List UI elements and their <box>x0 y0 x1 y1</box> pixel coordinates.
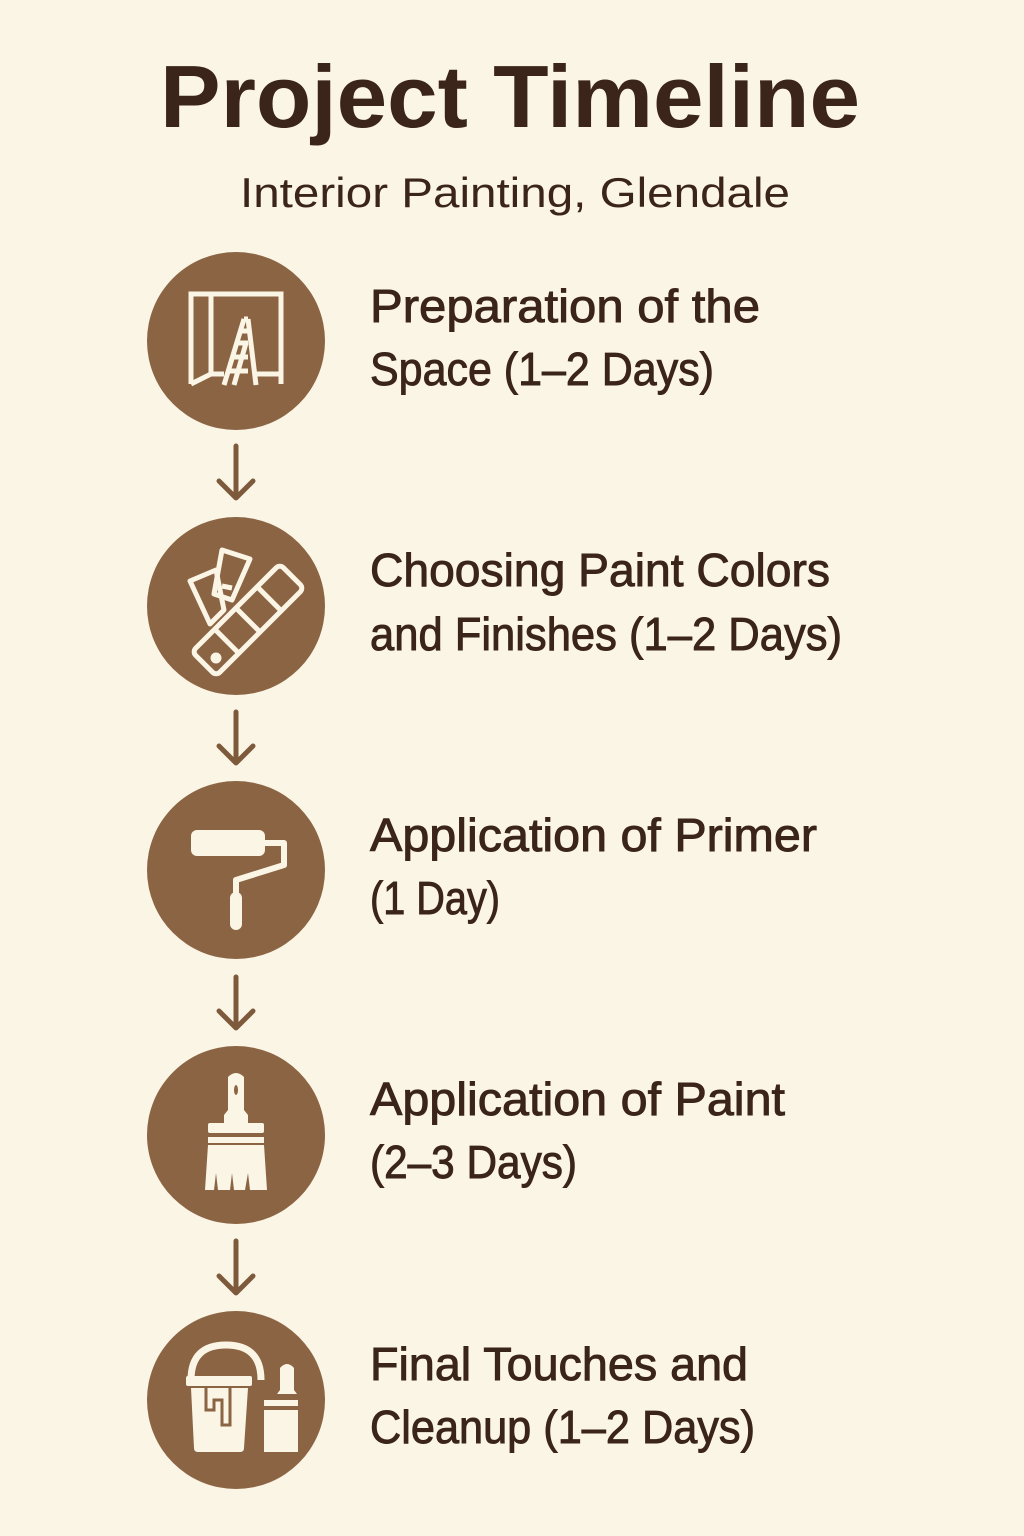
step 2 text: and Finishes (1–2 Days) <box>370 608 842 660</box>
title: Project Timeline <box>160 47 860 146</box>
step 1 text <box>370 280 760 395</box>
icon: bucket and brush <box>147 1311 325 1489</box>
step 4: paint <box>147 1046 785 1224</box>
step 5 text: Cleanup (1–2 Days) <box>370 1401 755 1453</box>
step 4 text: (2–3 Days) <box>370 1136 577 1188</box>
subtitle: Interior Painting, Glendale <box>240 169 790 216</box>
step 3: primer <box>147 781 817 959</box>
step 4 text <box>370 1073 785 1188</box>
step 3 text: Application of Primer <box>370 809 817 861</box>
icon: paint roller <box>147 781 325 959</box>
arrow 1 <box>219 446 253 498</box>
icon: color swatches <box>147 517 325 695</box>
step 1 text: Space (1–2 Days) <box>370 343 714 395</box>
icon: paintbrush <box>147 1046 325 1224</box>
icon: room with ladder <box>147 252 325 430</box>
step 5: cleanup <box>147 1311 755 1489</box>
step 3 text: (1 Day) <box>370 872 500 924</box>
step 2: colors <box>147 517 842 695</box>
step 2 text: Choosing Paint Colors <box>370 544 830 596</box>
arrow 4 <box>219 1241 253 1293</box>
step 5 text: Final Touches and <box>370 1338 748 1390</box>
arrow 2 <box>219 712 253 763</box>
step 5 text <box>370 1338 755 1453</box>
step 4 text: Application of Paint <box>370 1073 785 1125</box>
step 3 text <box>370 809 817 924</box>
step 1: preparation <box>147 252 760 430</box>
arrow 3 <box>219 977 253 1028</box>
step 2 text <box>370 544 842 660</box>
step 1 text: Preparation of the <box>370 280 760 332</box>
